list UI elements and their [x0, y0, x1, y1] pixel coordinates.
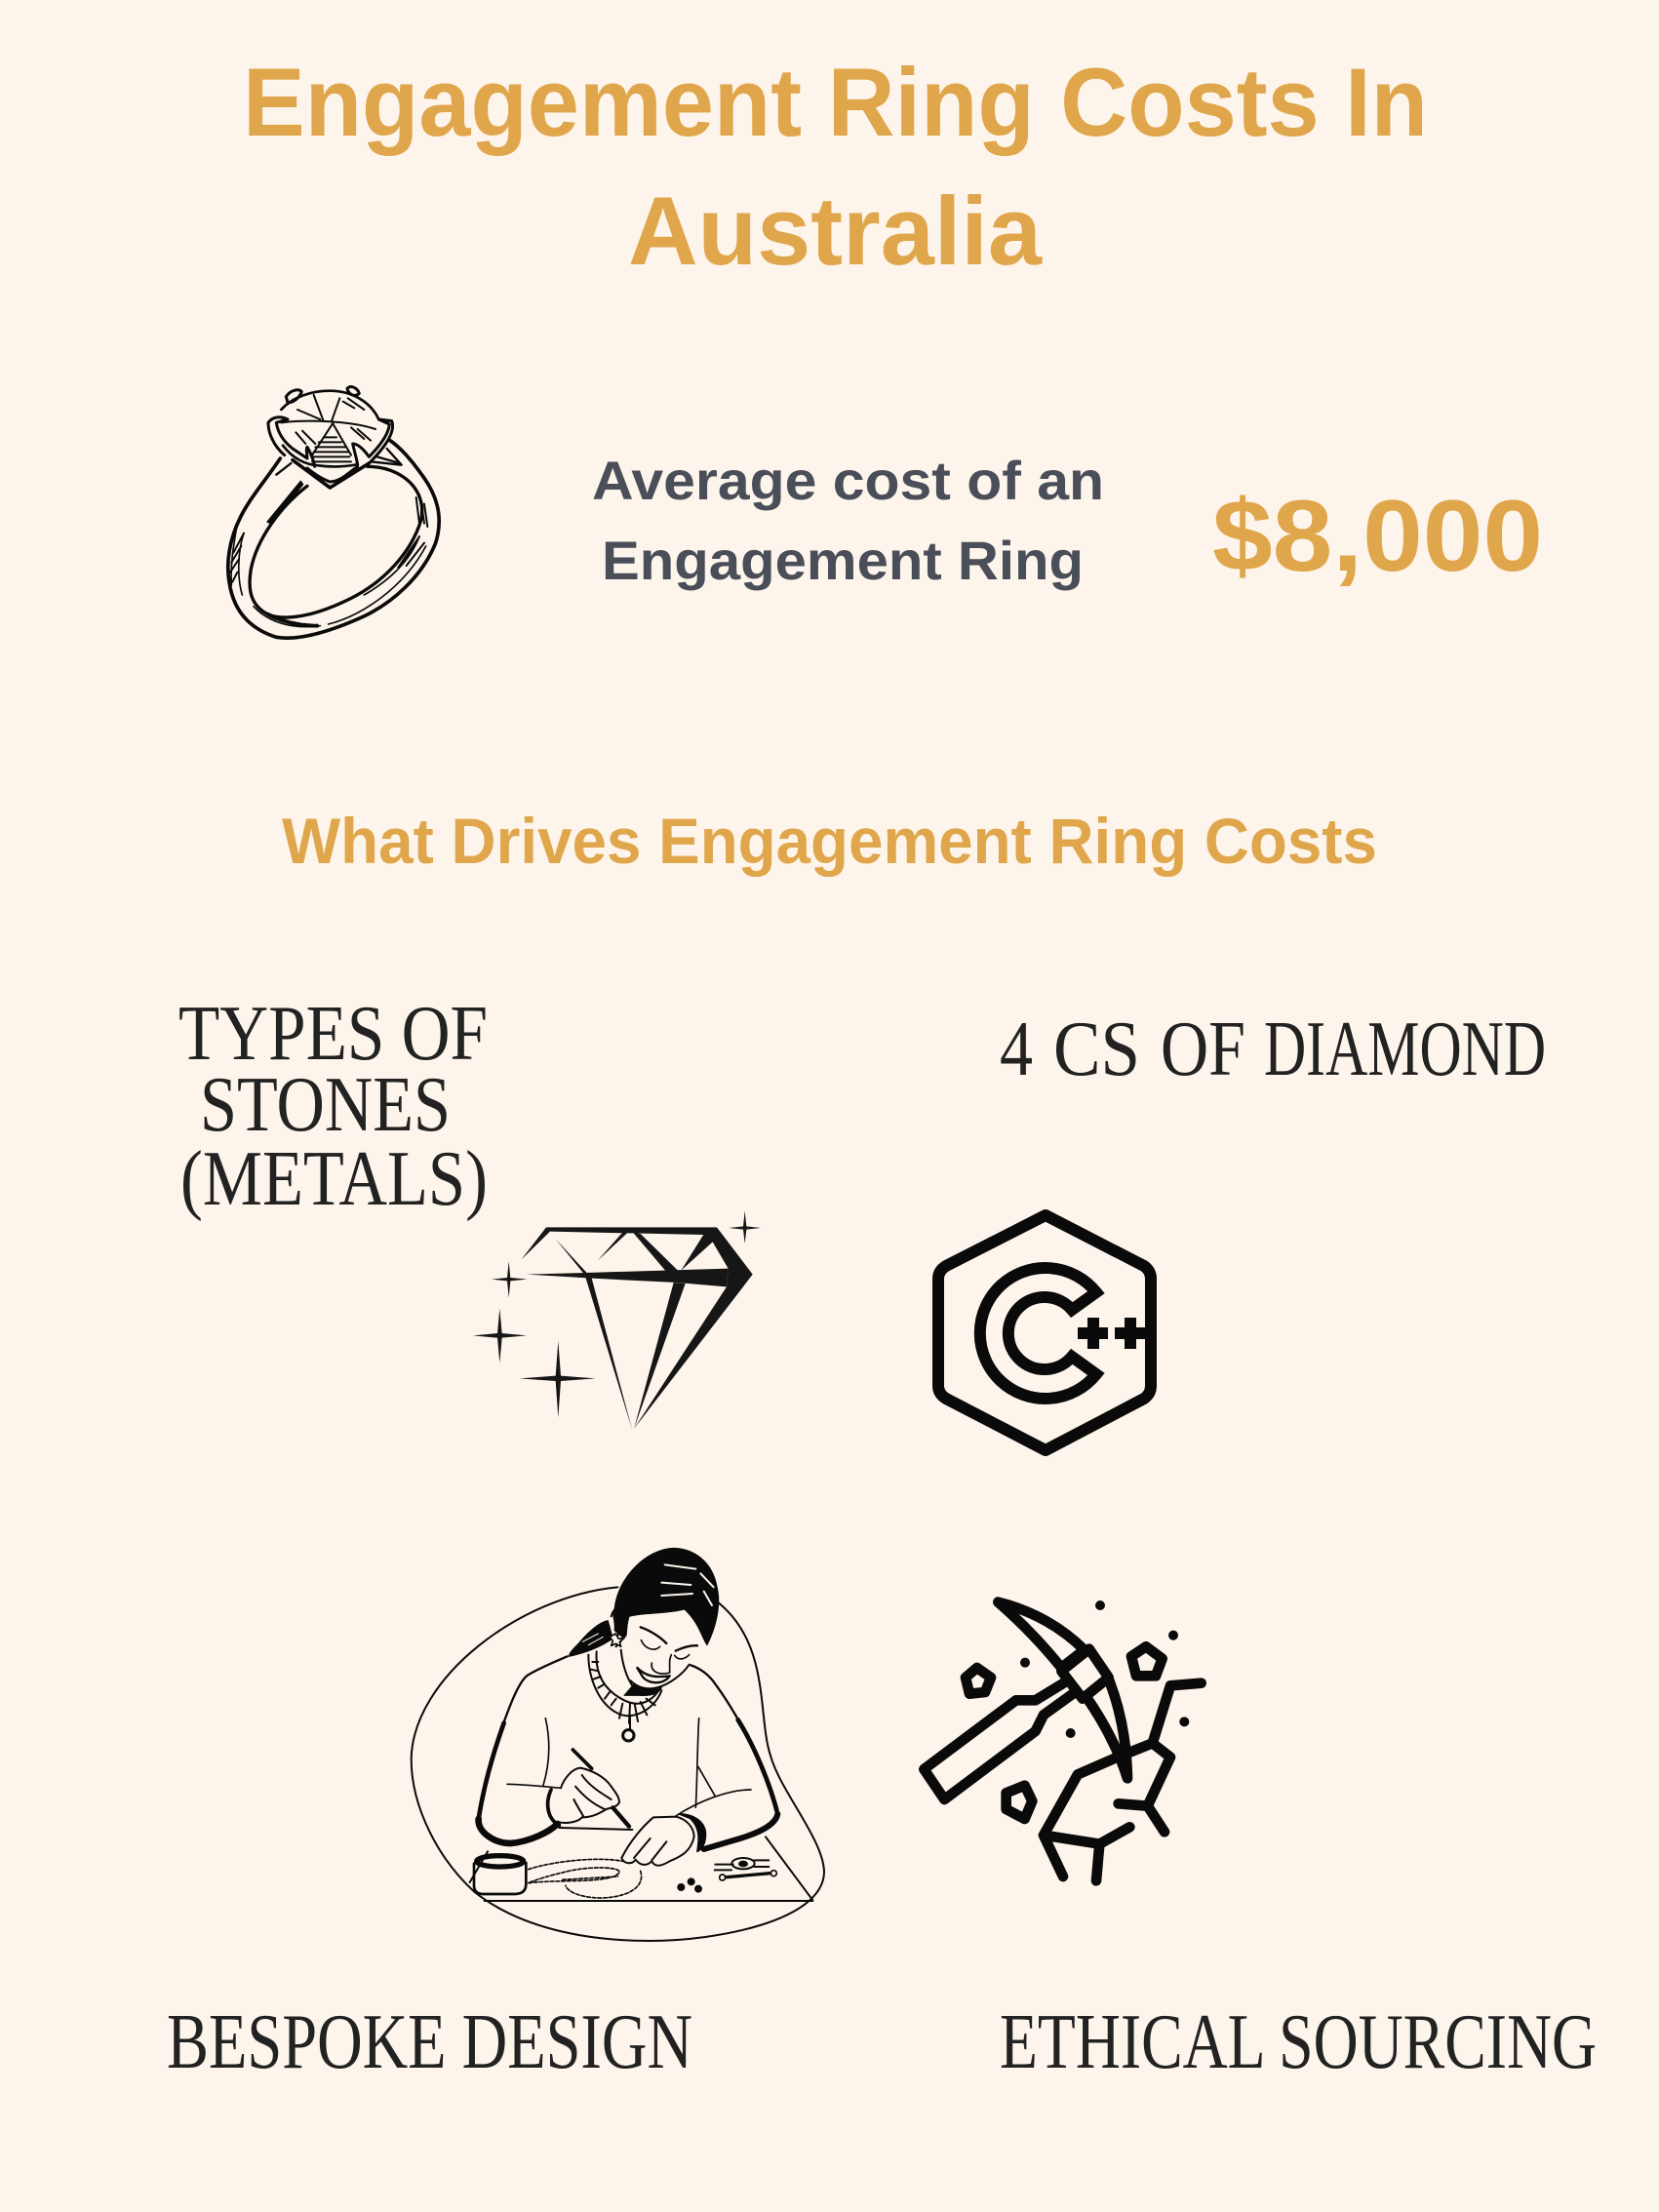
stone: [281, 391, 378, 466]
label: 4 Cs of diamond: [1000, 1007, 1546, 1092]
icon: diamond with sparkles: [473, 1211, 761, 1431]
average cost value: $8,000: [1212, 480, 1543, 593]
title: Australia: [628, 177, 1043, 285]
average cost label: Engagement Ring: [602, 530, 1084, 591]
label: types of stones: [178, 991, 488, 1222]
star earring: [610, 1634, 623, 1646]
hair: [613, 1548, 719, 1645]
icon: pickaxe and rocks: [924, 1600, 1202, 1880]
average cost label: Average cost of an: [592, 450, 1104, 511]
beads: [678, 1883, 685, 1891]
title: [243, 48, 1428, 285]
label: 4 Cs of diamond: OF: [1161, 1007, 1245, 1092]
label: types of stones: (METALS): [180, 1136, 488, 1222]
label: types of stones: TYPES OF: [178, 991, 488, 1077]
average cost label: [592, 450, 1104, 591]
section heading: What Drives Engagement Ring Costs: [282, 805, 1377, 877]
table: [470, 1828, 812, 1901]
icon: C++ hexagon: [938, 1215, 1151, 1450]
bowl: [474, 1863, 526, 1894]
label: bespoke design: BESPOKE DESIGN: [167, 1999, 692, 2085]
left hand and tool: [559, 1768, 619, 1823]
label: 4 Cs of diamond: 4: [1000, 1007, 1033, 1092]
label: 4 Cs of diamond: DIAMOND: [1264, 1007, 1546, 1092]
prongs and basket: [268, 417, 393, 488]
title: Engagement Ring Costs In: [243, 48, 1428, 156]
face: [612, 1607, 690, 1688]
icon: engagement ring sketch: [228, 387, 439, 638]
right hand: [621, 1817, 694, 1866]
label: 4 Cs of diamond: CS: [1053, 1007, 1140, 1092]
label: types of stones: STONES: [200, 1062, 451, 1148]
necklace: [588, 1651, 661, 1723]
tools: [715, 1860, 769, 1870]
cuffs: [680, 1814, 705, 1851]
beads strings: [529, 1859, 642, 1898]
body outline: [494, 1656, 568, 1749]
icon: jeweller at work: [412, 1548, 824, 1941]
background blob: [412, 1587, 824, 1941]
